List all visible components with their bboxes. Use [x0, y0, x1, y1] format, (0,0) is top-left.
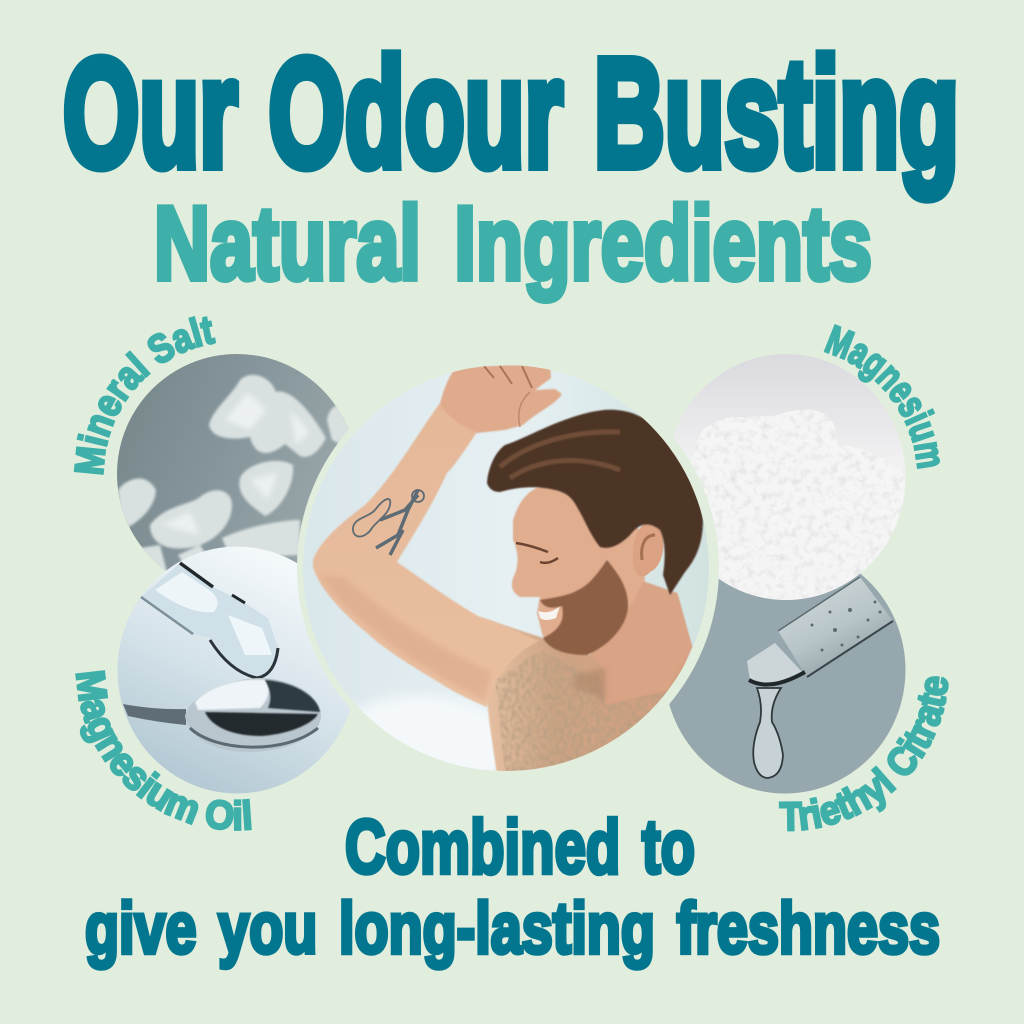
label: Triethyl Citrate: Triethyl Citrate	[778, 676, 949, 832]
dropper	[141, 563, 278, 678]
photo: magnesium oil	[110, 545, 365, 795]
torso	[480, 593, 692, 775]
drop	[753, 688, 783, 778]
tagline line 1: Combined to	[345, 805, 695, 890]
bottle	[778, 577, 893, 677]
ear	[633, 524, 663, 576]
label: Mineral Salt: Mineral Salt	[74, 316, 216, 475]
beard	[540, 560, 628, 655]
label: Magnesium: Magnesium	[824, 324, 940, 470]
hair	[487, 410, 703, 595]
upper chest shadow	[575, 668, 605, 705]
tattoo	[353, 490, 424, 555]
label: Magnesium Oil: Magnesium Oil	[75, 670, 252, 831]
centre photo ring	[297, 357, 719, 779]
smile	[538, 606, 560, 620]
bottle neck	[747, 643, 803, 687]
arm	[313, 403, 540, 707]
face	[512, 485, 645, 655]
dropper bottle with drop	[747, 577, 893, 778]
chest hair	[495, 650, 670, 775]
photo: man applying deodorant	[303, 365, 709, 771]
photo: magnesium powder	[673, 354, 906, 600]
photo: mineral salt	[117, 354, 348, 571]
photo: triethyl citrate	[669, 574, 906, 794]
spoon	[123, 678, 321, 752]
hand	[440, 364, 562, 433]
water droplets	[810, 600, 882, 652]
neck	[590, 580, 692, 705]
eye and brow	[516, 543, 558, 563]
